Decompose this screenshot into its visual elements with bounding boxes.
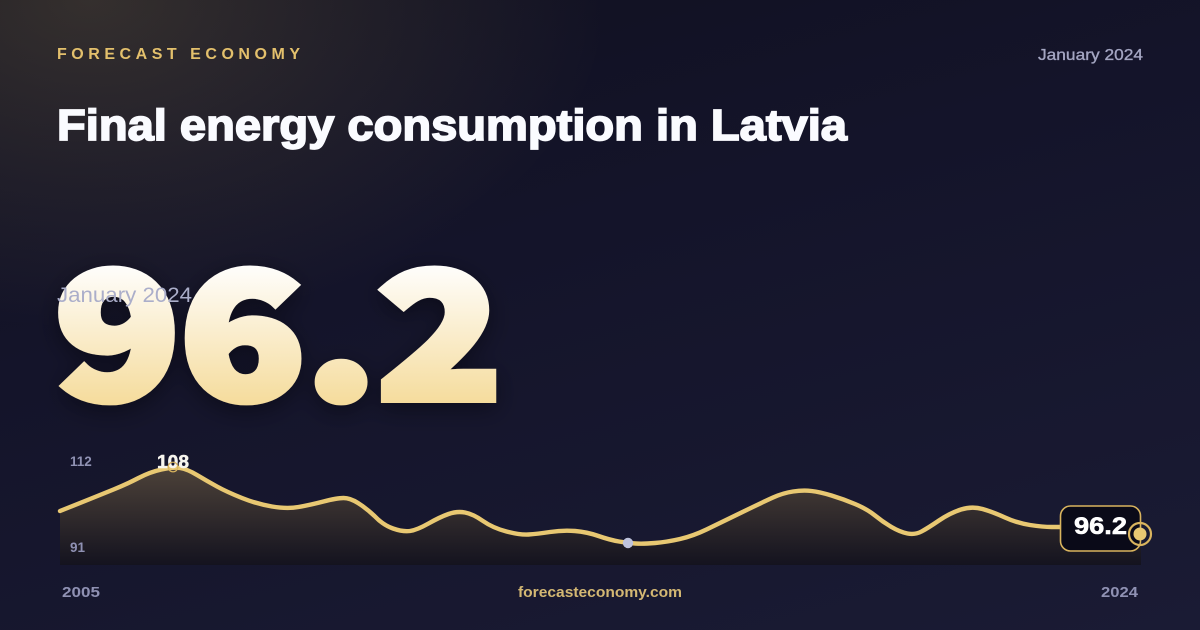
area under line: [60, 468, 1141, 565]
brand label: FORECAST ECONOMY: [57, 46, 300, 63]
date overlapping value: January 2024: [57, 284, 192, 307]
big value: 96.2: [55, 197, 502, 450]
source url: forecasteconomy.com: [518, 584, 682, 601]
date top right: January 2024: [1038, 47, 1143, 64]
sparkline chart: [60, 452, 1151, 565]
latest value badge: [1060, 506, 1140, 551]
start year: 2005: [62, 584, 100, 601]
latest point marker: [1129, 523, 1151, 545]
latest value badge: 96.2: [1074, 513, 1127, 540]
peak value label: 108: [157, 452, 189, 472]
y axis min label: 91: [70, 540, 86, 555]
title: Final energy consumption in Latvia: [57, 101, 848, 150]
end year: 2024: [1101, 584, 1139, 601]
y axis max label: 112: [70, 454, 92, 469]
peak marker: [168, 462, 178, 472]
low point marker: [623, 538, 633, 548]
trend line: [60, 468, 1070, 544]
